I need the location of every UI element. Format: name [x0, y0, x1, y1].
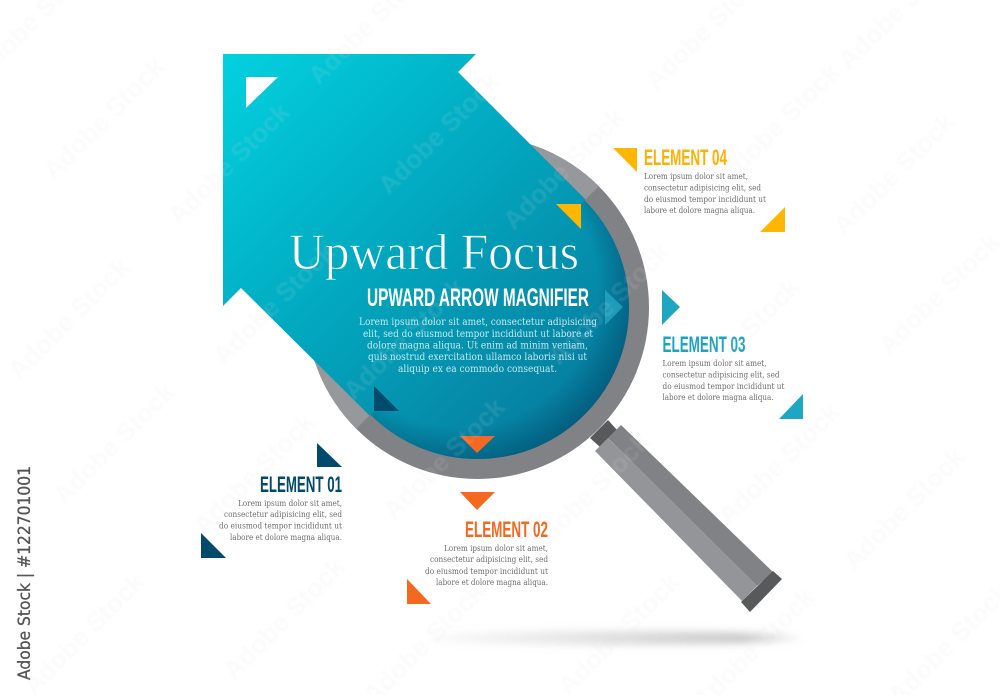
watermarks: Adobe Stock — [187, 406, 321, 540]
watermarks: Adobe Stock — [217, 551, 351, 685]
watermarks: Adobe Stock — [337, 271, 471, 405]
title: Upward Focus — [289, 225, 579, 281]
handle collar — [590, 420, 617, 447]
panel: element 03: consectetur adipisicing elit, sed — [662, 370, 780, 380]
panel: element 01: Lorem ipsum dolor sit amet, — [238, 499, 342, 509]
panel: element 03: labore et dolore magna aliqua. — [662, 393, 774, 403]
panel: element 01: consectetur adipisicing elit, sed — [224, 510, 342, 520]
ground shadow — [430, 631, 800, 645]
handle — [595, 425, 773, 601]
panel: element 04: consectetur adipisicing elit, sed — [644, 184, 761, 194]
panel: element 04 — [613, 145, 785, 232]
watermarks: Adobe Stock — [377, 391, 511, 525]
panel: element 01 — [201, 443, 342, 558]
panel: element 02: labore et dolore magna aliqua. — [436, 578, 548, 588]
watermarks: Adobe Stock — [672, 271, 806, 405]
panel: element 02 — [407, 492, 548, 604]
panel: element 03 — [662, 290, 803, 419]
watermarks: Adobe Stock — [827, 106, 961, 240]
watermarks: Adobe Stock — [497, 101, 631, 235]
handle end cap — [741, 571, 782, 612]
panel: element 04: ELEMENT 04 — [644, 145, 727, 170]
panel: element 02: do eiusmod tempor incididunt ut — [425, 567, 548, 577]
watermarks: Adobe Stock — [207, 236, 341, 370]
watermarks: Adobe Stock — [712, 396, 846, 530]
watermarks: Adobe Stock — [712, 56, 846, 190]
icon: navy triangle in lens — [374, 386, 399, 411]
lens body text: elit, sed do eiusmod tempor incididunt ut labore et — [363, 329, 593, 340]
subtitle: UPWARD ARROW MAGNIFIER — [367, 284, 589, 312]
watermarks: Adobe Stock — [47, 376, 181, 510]
panel: element 02: Lorem ipsum dolor sit amet, — [444, 544, 548, 554]
watermarks: Adobe Stock — [837, 441, 971, 575]
icon: white corner triangle — [246, 77, 278, 108]
lens body text: aliquip ex ea commodo consequat. — [398, 364, 557, 375]
lens body text: dolore magna aliqua. Ut enim ad minim veniam, — [367, 340, 588, 352]
watermarks: Adobe Stock — [2, 251, 136, 385]
panel: element 01: labore et dolore magna aliqua. — [230, 533, 342, 543]
watermarks: Adobe Stock — [162, 96, 296, 230]
icon: orange triangle in lens — [460, 436, 495, 453]
panel: element 03: ELEMENT 03 — [662, 332, 746, 357]
magnifying glass — [306, 136, 782, 612]
arrow and lens panel — [223, 54, 630, 460]
panel: element 01: do eiusmod tempor incididunt ut — [219, 522, 342, 532]
watermarks: Adobe Stock — [37, 51, 171, 185]
stock id side label: Adobe Stock | #122701001 — [15, 466, 35, 680]
panel: element 04: Lorem ipsum dolor sit amet, — [644, 172, 748, 182]
panel: element 04: do eiusmod tempor incididunt ut — [644, 195, 766, 205]
watermarks: Adobe Stock — [372, 66, 506, 200]
panel: element 03: Lorem ipsum dolor sit amet, — [662, 359, 766, 369]
lens body text: quis nostrud exercitation ullamco laboris nisi ut — [368, 352, 587, 363]
panel: element 04: labore et dolore magna aliqua. — [644, 206, 755, 216]
lens body text — [359, 317, 597, 375]
lens ring — [306, 136, 649, 479]
panel: element 02: ELEMENT 02 — [465, 517, 548, 542]
watermarks: Adobe Stock — [542, 236, 676, 370]
panel: element 01: ELEMENT 01 — [260, 472, 342, 497]
panel: element 03: do eiusmod tempor incididunt ut — [662, 382, 785, 392]
icon: yellow triangle in lens — [556, 204, 581, 229]
watermarks: Adobe Stock — [522, 426, 656, 560]
icon: faint blue triangle in lens — [605, 290, 623, 325]
lens body text: Lorem ipsum dolor sit amet, consectetur adipisicing — [359, 317, 597, 328]
panel: element 02: consectetur adipisicing elit, sed — [430, 555, 548, 565]
